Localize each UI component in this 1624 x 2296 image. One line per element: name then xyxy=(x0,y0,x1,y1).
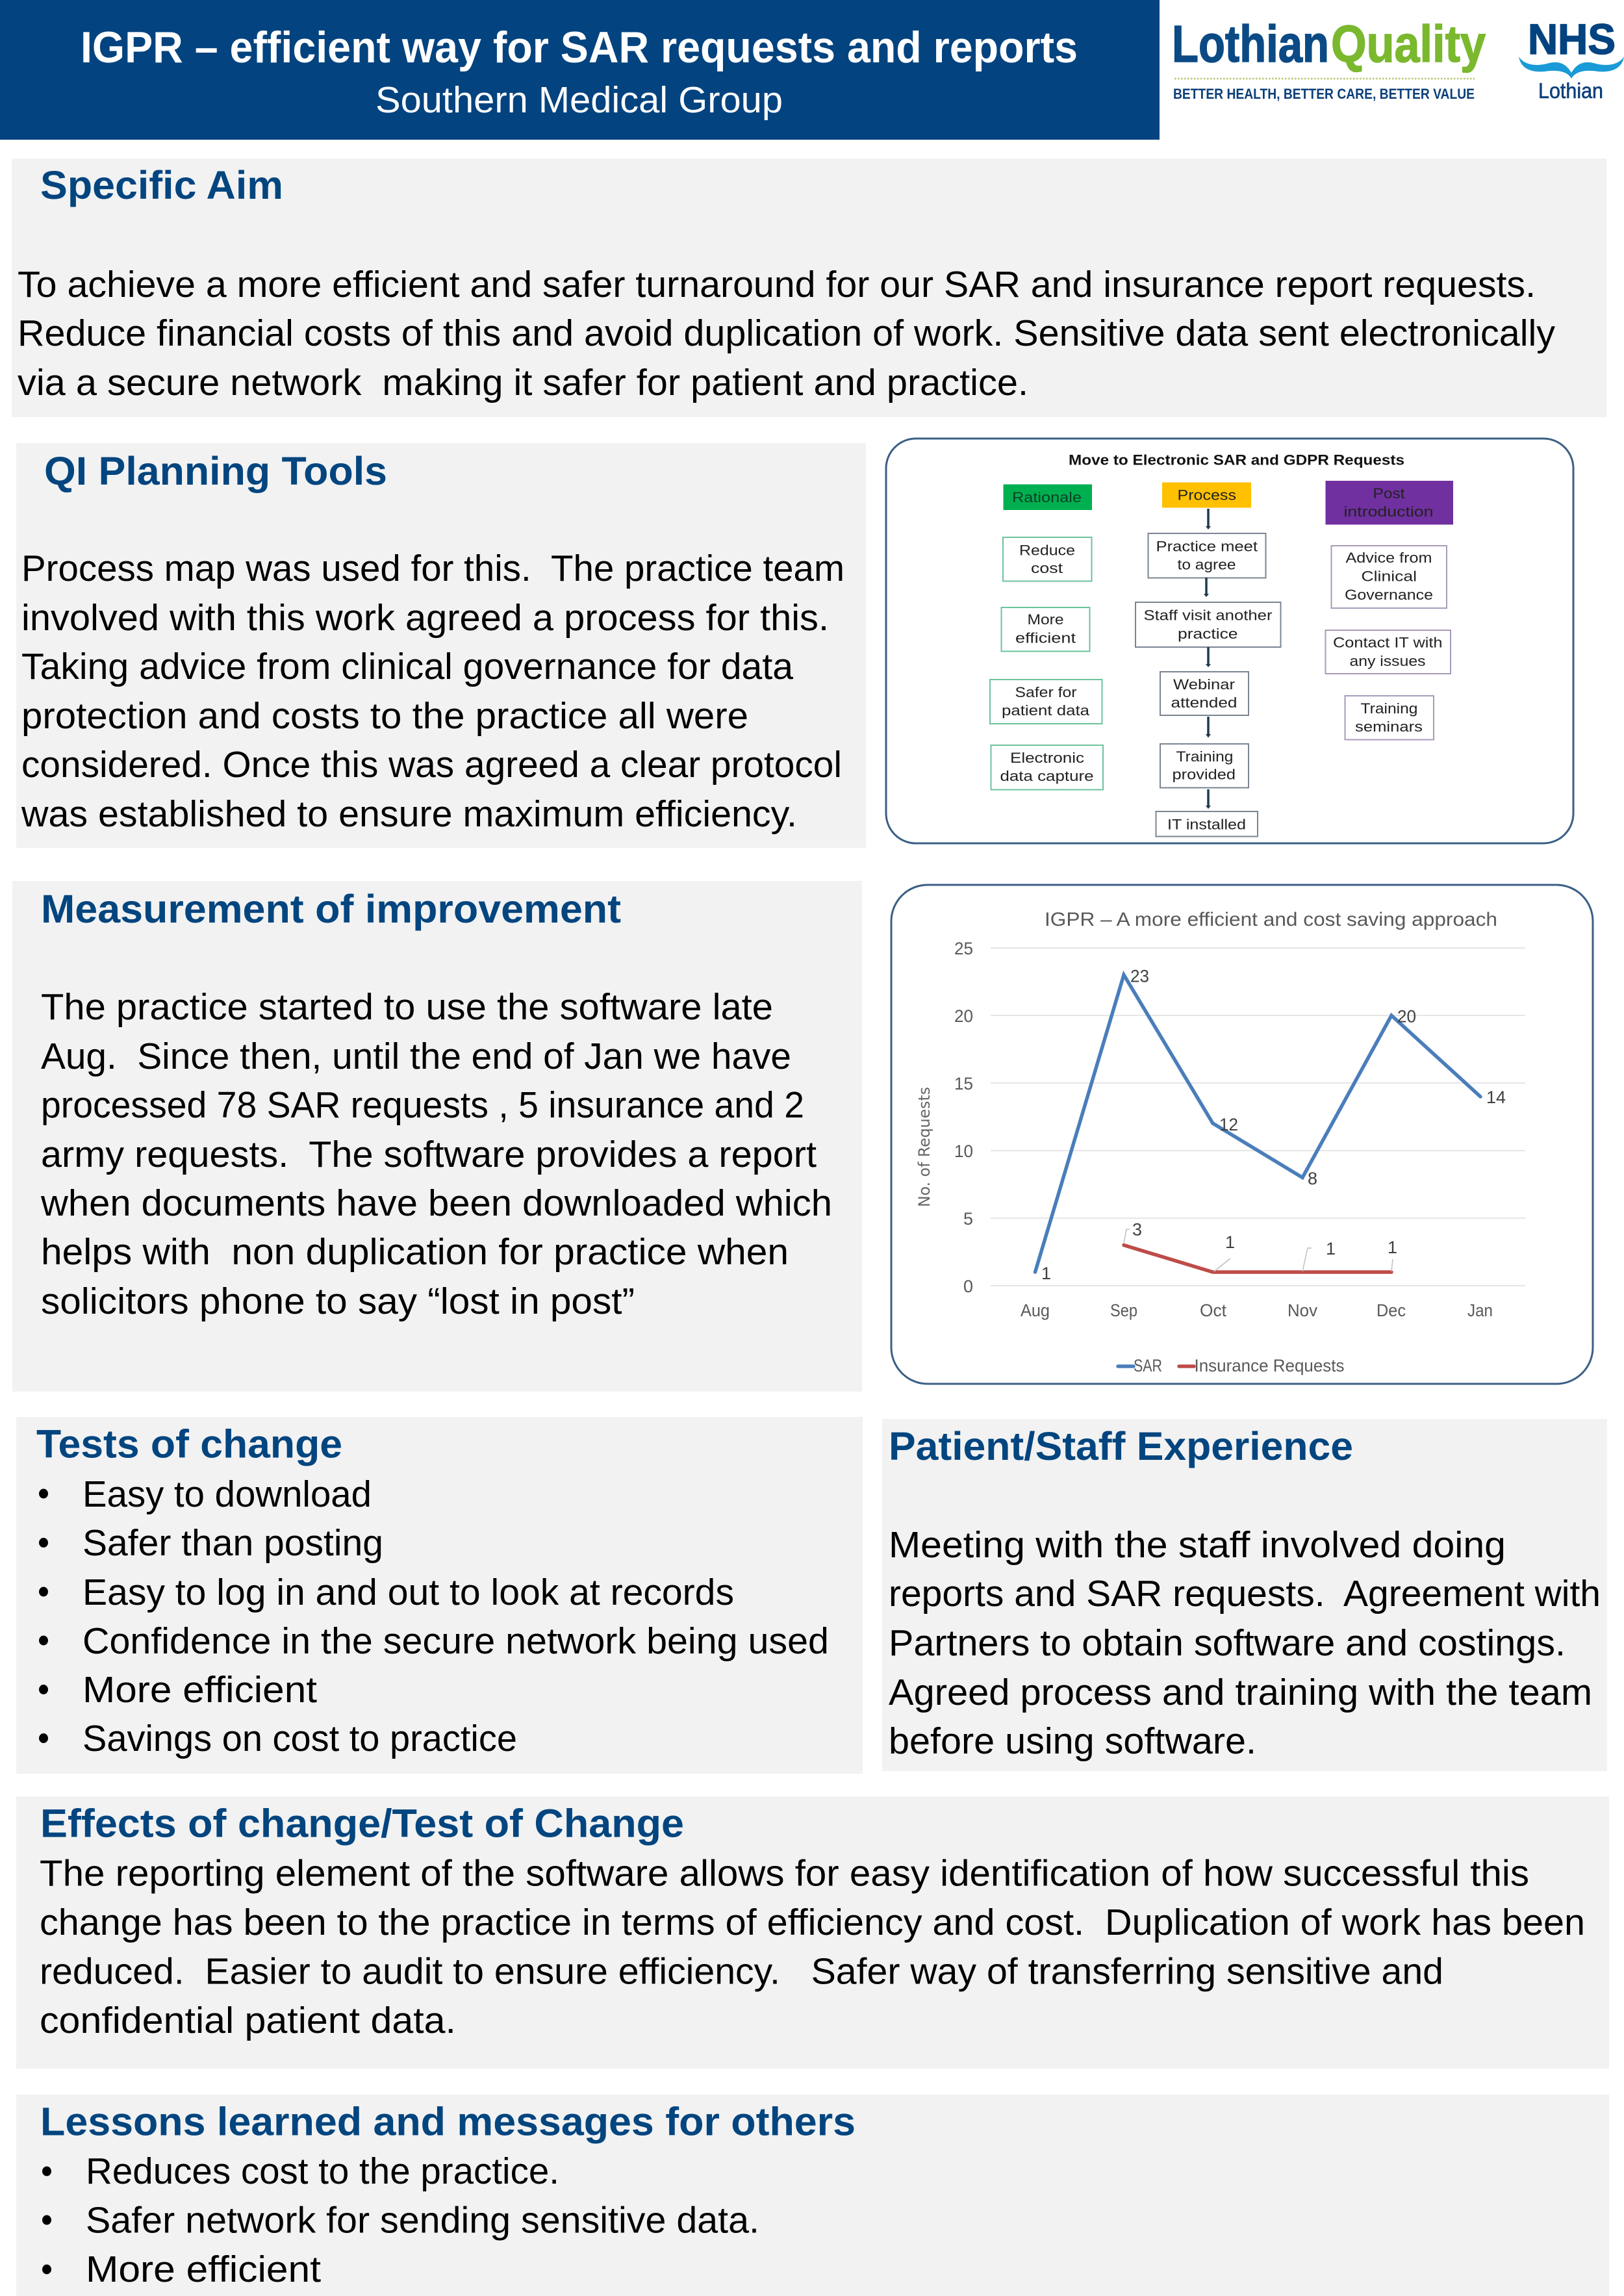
column: rationale: Rationale xyxy=(1012,489,1082,505)
column: post introduction: Governance xyxy=(1345,587,1433,603)
text block: experience: Meeting with the staff involved doing xyxy=(889,1524,1506,1566)
gridlines and y-axis: 0 xyxy=(963,1277,973,1296)
x-axis labels: Nov xyxy=(1288,1301,1317,1320)
logo: Lothian Quality: Quality xyxy=(1331,15,1486,73)
column: post introduction: Contact IT with xyxy=(1333,634,1442,651)
title: IGPR – efficient way for SAR requests and reports xyxy=(81,23,1078,72)
x-axis labels: Oct xyxy=(1200,1301,1226,1320)
text block: aim xyxy=(18,264,1555,403)
column: process: to agree xyxy=(1177,556,1236,573)
gridlines and y-axis: 15 xyxy=(954,1074,973,1093)
column: post introduction: Advice from xyxy=(1346,550,1432,566)
text block: experience: before using software. xyxy=(889,1720,1256,1762)
arrows: process flow xyxy=(1204,509,1211,809)
column: process: attended xyxy=(1171,695,1237,711)
text block: experience: Partners to obtain software and costings. xyxy=(889,1622,1566,1664)
text block: effects: The reporting element of the software allows for easy identification of how successful this xyxy=(40,1853,1529,1894)
heading: effects of change: Effects of change/Test of Change xyxy=(40,1801,684,1845)
legend: SAR xyxy=(1134,1356,1162,1375)
text block: QI planning: considered. Once this was agreed a clear protocol xyxy=(21,744,842,785)
column: rationale: Reduce xyxy=(1019,542,1075,559)
heading: QI planning tools: QI Planning Tools xyxy=(44,449,387,493)
text block: measurement xyxy=(40,986,832,1322)
heading: patient/staff experience: Patient/Staff Experience xyxy=(889,1424,1353,1468)
x-axis labels: Aug xyxy=(1021,1301,1050,1320)
panel: QI planning tools xyxy=(16,443,866,848)
series: SAR: 14 xyxy=(1486,1088,1506,1107)
x-axis labels: Jan xyxy=(1467,1301,1493,1320)
x-axis labels: Sep xyxy=(1110,1301,1137,1320)
text block: measurement: helps with non duplication for practice when xyxy=(41,1231,789,1273)
panel: patient/staff experience xyxy=(882,1419,1607,1771)
series: SAR: 12 xyxy=(1219,1115,1238,1134)
column: post introduction: Post xyxy=(1373,485,1404,502)
text block: experience: Agreed process and training with the team xyxy=(889,1672,1592,1713)
column: post introduction: Clinical xyxy=(1362,568,1417,585)
gridlines and y-axis: 5 xyxy=(963,1209,973,1229)
text block: measurement: solicitors phone to say “lost in post” xyxy=(41,1281,635,1322)
text block: QI planning xyxy=(21,548,844,835)
panel: line chart xyxy=(891,885,1593,1384)
text block: effects xyxy=(40,1853,1585,2041)
column: process xyxy=(1136,482,1281,837)
series: insurance requests: 1 xyxy=(1326,1239,1336,1258)
logo: NHS Lothian: Lothian xyxy=(1538,79,1603,103)
logo: Lothian Quality: Lothian xyxy=(1172,15,1329,73)
gridlines and y-axis: 25 xyxy=(954,939,973,958)
text block: aim: To achieve a more efficient and safer turnaround for our SAR and insurance report requests. xyxy=(18,264,1536,305)
column: post introduction: introduction xyxy=(1343,504,1433,520)
column: rationale: More xyxy=(1028,611,1064,628)
panel: specific aim xyxy=(12,159,1606,417)
bulleted list: tests: More efficient xyxy=(82,1669,317,1711)
column: process: Training xyxy=(1176,748,1233,765)
heading: lessons learned: Lessons learned and messages for others xyxy=(40,2100,856,2144)
y-axis label: No. of Requests xyxy=(915,1087,933,1207)
text block: QI planning: Process map was used for this. The practice team xyxy=(21,548,844,589)
column: rationale: Electronic xyxy=(1010,750,1084,766)
series: insurance requests: 1 xyxy=(1388,1238,1397,1257)
text block: aim: via a secure network making it safer for patient and practice. xyxy=(18,362,1028,403)
logo: Lothian Quality xyxy=(1172,15,1486,102)
text block: experience xyxy=(889,1524,1601,1762)
series: SAR xyxy=(1035,967,1506,1283)
column: process: practice xyxy=(1178,626,1238,642)
text block: QI planning: Taking advice from clinical governance for data xyxy=(21,646,793,687)
column: rationale: data capture xyxy=(1000,768,1094,784)
column: process: IT installed xyxy=(1167,816,1246,833)
bulleted list: tests: Easy to download xyxy=(82,1473,372,1515)
heading: specific aim: Specific Aim xyxy=(40,163,283,207)
x-axis labels xyxy=(1021,1301,1493,1320)
series: SAR: 23 xyxy=(1130,967,1149,986)
text block: measurement: The practice started to use the software late xyxy=(41,986,773,1028)
legend xyxy=(1118,1356,1345,1375)
column: rationale: efficient xyxy=(1015,630,1076,646)
panel: process map xyxy=(886,439,1573,843)
panel: tests of change xyxy=(16,1417,863,1774)
text block: QI planning: involved with this work agreed a process for this. xyxy=(21,597,829,639)
header banner xyxy=(0,0,1160,140)
heading: measurement: Measurement of improvement xyxy=(41,887,621,931)
panel: effects of change xyxy=(16,1796,1609,2069)
series: insurance requests xyxy=(1124,1220,1397,1272)
text block: QI planning: was established to ensure maximum efficiency. xyxy=(21,793,797,835)
column: rationale xyxy=(990,485,1103,790)
text block: QI planning: protection and costs to the practice all were xyxy=(21,695,748,737)
logo: Lothian Quality: BETTER HEALTH, BETTER CARE, BETTER VALUE xyxy=(1173,86,1475,102)
bulleted list: lessons: More efficient xyxy=(86,2249,321,2290)
heading: tests of change: Tests of change xyxy=(36,1422,342,1466)
bulleted list: lessons: Reduces cost to the practice. xyxy=(86,2150,559,2192)
series: insurance requests: 1 xyxy=(1225,1232,1235,1252)
text block: effects: reduced. Easier to audit to ensure efficiency. Safer way of transferring sensitive and xyxy=(40,1950,1443,1992)
column: post introduction: Training xyxy=(1360,700,1417,717)
bulleted list: tests: Safer than posting xyxy=(82,1522,383,1564)
bulleted list: lessons xyxy=(42,2150,759,2290)
subtitle: Southern Medical Group xyxy=(375,79,783,121)
bulleted list: tests: Confidence in the secure network being used xyxy=(82,1620,829,1662)
chart title: IGPR – A more efficient and cost saving approach xyxy=(1045,909,1497,930)
logo: NHS Lothian xyxy=(1519,15,1624,103)
text block: effects: confidential patient data. xyxy=(40,2000,456,2041)
series: insurance requests: 3 xyxy=(1132,1220,1142,1240)
series: SAR: 20 xyxy=(1397,1007,1416,1027)
column: rationale: Safer for xyxy=(1015,684,1077,700)
text block: measurement: when documents have been downloaded which xyxy=(40,1182,832,1224)
column: process: Practice meet xyxy=(1156,538,1258,555)
panel: measurement of improvement xyxy=(12,881,862,1392)
column: rationale: patient data xyxy=(1002,702,1090,719)
bulleted list: tests xyxy=(39,1473,829,1759)
gridlines and y-axis xyxy=(954,939,1525,1296)
series: SAR: 1 xyxy=(1041,1264,1051,1283)
column: process: Webinar xyxy=(1173,676,1235,693)
x-axis labels: Dec xyxy=(1377,1301,1406,1320)
gridlines and y-axis: 20 xyxy=(954,1006,973,1026)
text block: measurement: Aug. Since then, until the end of Jan we have xyxy=(41,1036,791,1077)
column: post introduction: seminars xyxy=(1355,719,1423,735)
panel: lessons learned xyxy=(16,2095,1609,2296)
text block: effects: change has been to the practice in terms of efficiency and cost. Duplication of work has been xyxy=(40,1902,1585,1943)
column: rationale: cost xyxy=(1031,560,1063,576)
series: SAR: 8 xyxy=(1308,1169,1317,1188)
column: process: provided xyxy=(1172,767,1236,782)
logo: NHS Lothian: NHS xyxy=(1528,15,1616,63)
column: process: Process xyxy=(1177,487,1236,503)
column: post introduction: any issues xyxy=(1350,653,1425,669)
bulleted list: tests: Savings on cost to practice xyxy=(82,1718,517,1759)
bulleted list: lessons: Safer network for sending sensitive data. xyxy=(86,2200,759,2241)
process map title: Move to Electronic SAR and GDPR Requests xyxy=(1069,452,1404,468)
text block: aim: Reduce financial costs of this and avoid duplication of work. Sensitive data sent electronically xyxy=(18,313,1555,354)
text block: measurement: army requests. The software provides a report xyxy=(41,1134,817,1175)
text block: experience: reports and SAR requests. Agreement with xyxy=(889,1573,1601,1614)
legend: Insurance Requests xyxy=(1194,1356,1345,1375)
text block: measurement: processed 78 SAR requests , 5 insurance and 2 xyxy=(41,1084,804,1126)
column: process: Staff visit another xyxy=(1143,607,1272,624)
gridlines and y-axis: 10 xyxy=(954,1142,973,1161)
column: post introduction xyxy=(1325,481,1453,739)
bulleted list: tests: Easy to log in and out to look at records xyxy=(82,1572,734,1613)
